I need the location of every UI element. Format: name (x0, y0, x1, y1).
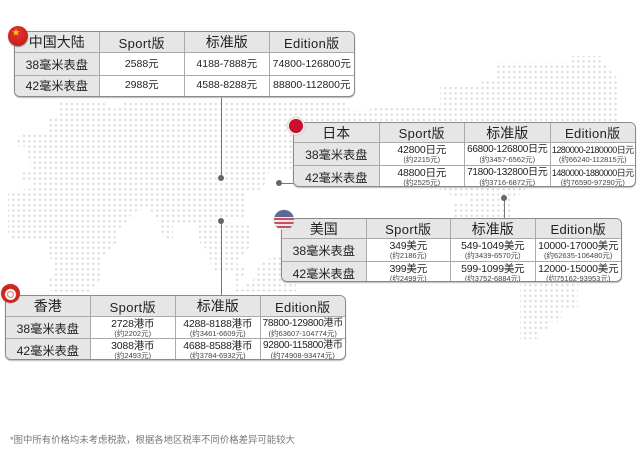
row: 42mm: 42毫米表盘 (26, 79, 88, 93)
row: 38mm: 38毫米表盘 (305, 148, 367, 162)
row: 42mm: 48800日元 (397, 166, 446, 178)
row: 42mm (6, 339, 343, 360)
row: 38mm: (约3461-6609元) (190, 328, 246, 338)
row: 42mm: (约3784-6932元) (190, 350, 246, 360)
row: 42mm: (约2525元) (403, 178, 440, 186)
header row (6, 296, 345, 317)
header row: Edition版 (550, 222, 606, 237)
header row: Edition版 (275, 300, 331, 314)
header row (294, 123, 635, 143)
row: 42mm: 399美元 (389, 262, 427, 274)
row: 38mm: 4288-8188港币 (183, 318, 252, 330)
row: 42mm: 599-1099美元 (461, 262, 524, 274)
row: 42mm: (约76590-97290元) (561, 178, 625, 186)
row: 38mm: 38毫米表盘 (26, 58, 88, 72)
row: 38mm (282, 239, 621, 262)
header row: 美国 (310, 220, 338, 236)
row: 38mm (294, 143, 635, 166)
icon: Hong Kong flag (1, 284, 20, 303)
connector dot: China (218, 175, 224, 181)
row: 38mm: 2588元 (125, 58, 159, 70)
row: 42mm: 2988元 (125, 79, 159, 91)
row: 38mm: 549-1049美元 (461, 240, 524, 252)
row: 38mm: 1280000-2180000日元 (552, 145, 634, 155)
connector dot: Japan (276, 180, 282, 186)
row: 42mm: (约74908-93474元) (271, 350, 335, 360)
header row: Edition版 (565, 126, 621, 141)
row: 38mm: (约2215元) (403, 155, 440, 164)
row: 42mm: 4688-8588港币 (183, 340, 252, 352)
header row: 标准版 (472, 220, 514, 236)
row: 38mm (6, 317, 345, 339)
row: 42mm: 92800-115800港币 (263, 340, 343, 350)
row: 42mm: 1480000-1880000日元 (552, 168, 634, 178)
header row: 标准版 (197, 298, 239, 314)
row: 42mm: (约3716-6872元) (479, 178, 535, 186)
row: 38mm: 38毫米表盘 (293, 244, 355, 258)
row: 42mm (294, 166, 634, 186)
header row: 香港 (34, 298, 62, 314)
row: 38mm: (约63607-104774元) (269, 328, 337, 338)
icon: China flag: ★ (12, 28, 20, 37)
row: 38mm: (约3457-6562元) (479, 155, 535, 164)
header row: Sport版 (119, 36, 165, 50)
row: 38mm: 4188-7888元 (196, 58, 257, 70)
header row: Sport版 (399, 126, 445, 141)
row: 42mm: 4588-8288元 (196, 79, 257, 91)
row: 38mm: (约2186元) (390, 251, 427, 260)
row: 42mm: 3088港币 (111, 340, 154, 352)
header row (282, 219, 621, 239)
row: 38mm: 349美元 (389, 240, 427, 252)
header row: 日本 (322, 124, 350, 140)
row: 38mm: 38毫米表盘 (17, 322, 79, 336)
row: 42mm: 88800-112800元 (273, 79, 350, 91)
row: 38mm: 2728港币 (111, 318, 154, 330)
row: 42mm: 42毫米表盘 (305, 170, 367, 184)
row: 38mm: (约3439-6570元) (465, 251, 521, 260)
header row (15, 32, 354, 53)
row: 42mm: (约2493元) (114, 350, 151, 360)
header row: 中国大陆 (29, 34, 85, 50)
icon: USA flag (274, 210, 294, 230)
row: 38mm: (约2202元) (114, 328, 151, 338)
panel: China mainland prices (14, 31, 355, 97)
row: 42mm (15, 76, 350, 96)
header row: Edition版 (284, 36, 340, 50)
connector dot: USA (501, 195, 507, 201)
connector: USA (504, 198, 505, 219)
panel: USA prices (281, 218, 622, 282)
header row: 标准版 (206, 34, 248, 50)
row: 42mm: 12000-15000美元 (538, 262, 618, 274)
row: 38mm: 78800-129800港币 (263, 318, 343, 328)
connector: Japan (279, 182, 294, 184)
footnote: *图中所有价格均未考虑税款，根据各地区税率不同价格差异可能较大 (10, 434, 295, 445)
connector: Hong Kong (220, 221, 222, 296)
row: 38mm: 10000-17000美元 (538, 240, 618, 252)
header row: Sport版 (385, 222, 431, 237)
row: 42mm: 42毫米表盘 (17, 344, 79, 358)
row: 38mm: 74800-126800元 (273, 58, 351, 70)
header row: 标准版 (486, 124, 528, 140)
connector: China (220, 96, 222, 178)
row: 42mm: 42毫米表盘 (293, 266, 355, 280)
panel: Hong Kong prices (5, 295, 346, 360)
row: 38mm: 66800-126800日元 (467, 144, 547, 155)
row: 38mm: 42800日元 (397, 144, 446, 156)
row: 38mm: (约66240-112815元) (559, 155, 627, 164)
row: 42mm (282, 262, 618, 282)
connector dot: Hong Kong (218, 218, 224, 224)
icon: Japan flag (287, 117, 305, 135)
panel: Japan prices (293, 122, 636, 187)
row: 42mm: 71800-132800日元 (467, 166, 547, 178)
icon: China flag (8, 26, 28, 46)
row: 38mm (15, 53, 354, 76)
row: 38mm: (约62635-106480元) (544, 251, 612, 260)
header row: Sport版 (110, 300, 156, 314)
